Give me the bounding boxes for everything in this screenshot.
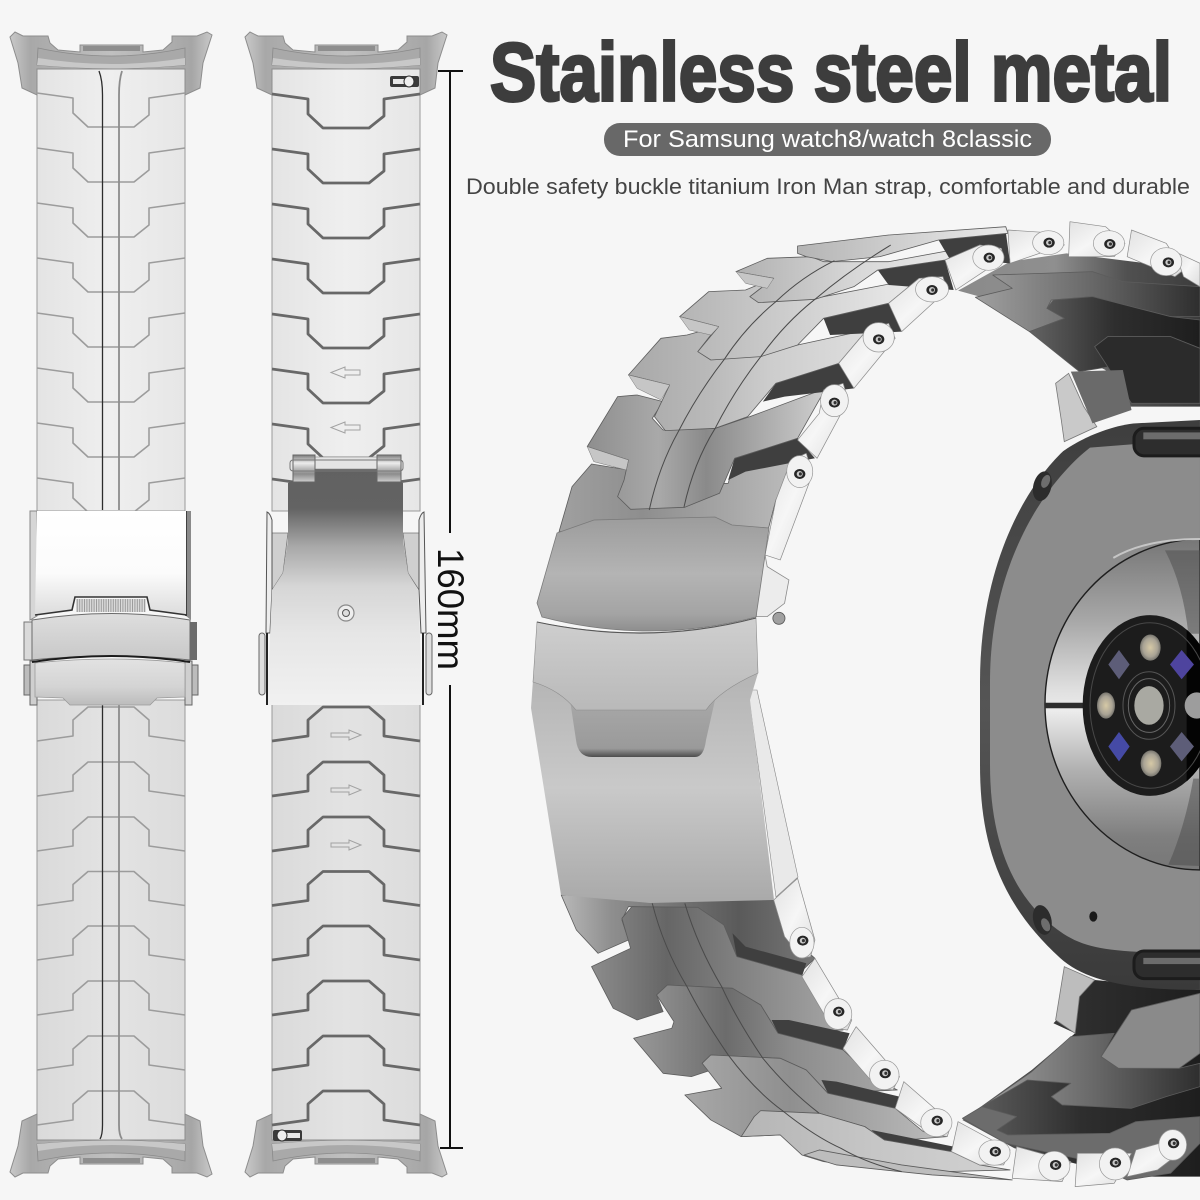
link B (587, 388, 826, 509)
center grooves (652, 903, 902, 1172)
buckle lower plate (531, 673, 774, 903)
top button (1134, 428, 1200, 456)
link L (804, 1150, 1012, 1180)
gap (733, 933, 806, 977)
center grooves (649, 245, 891, 510)
dimension: 160mm (430, 71, 471, 1148)
gap (821, 1080, 899, 1110)
icon: micro-adjust pin top (390, 76, 419, 87)
strap links and end caps (10, 32, 212, 1177)
link I (634, 985, 897, 1093)
link D (680, 278, 919, 360)
icon: micro-adjust pin bottom (273, 1130, 302, 1141)
link seams lower (37, 707, 185, 1125)
link seams upper (37, 93, 185, 512)
gap (772, 1020, 850, 1050)
front view strap (10, 32, 212, 1177)
clasp hinge (756, 553, 789, 624)
watch body back (980, 420, 1200, 990)
gap (728, 438, 815, 480)
link H (592, 907, 843, 1033)
far side band bottom (962, 967, 1200, 1180)
main band lower half (561, 878, 1187, 1187)
buckle upper plate (537, 517, 769, 631)
link seams lower (272, 707, 420, 1125)
gap (939, 232, 1010, 263)
center groove lines (99, 71, 122, 1139)
compatibility pill: For Samsung watch8/watch 8classic (623, 126, 1032, 153)
bottom button (1134, 951, 1200, 979)
sensor window (1083, 615, 1200, 796)
back view strap (245, 32, 447, 1177)
link E (736, 245, 980, 303)
link K (741, 1111, 1010, 1172)
gap (824, 303, 902, 335)
gap (763, 363, 854, 402)
side plates with pins (774, 878, 1187, 1187)
far side lug top (1056, 370, 1132, 442)
subtitle: Double safety buckle titanium Iron Man strap, comfortable and durable (466, 174, 1190, 199)
main buckle (531, 517, 798, 903)
side plates with pins (765, 222, 1200, 560)
arrows pointing right (331, 730, 361, 850)
knurled slot (570, 700, 715, 757)
link J (685, 1055, 947, 1142)
strap links and end caps (245, 32, 447, 1177)
main band upper half (559, 222, 1200, 624)
front clasp (24, 511, 198, 705)
vent hole (1089, 911, 1097, 922)
buckle right side strip (748, 690, 798, 897)
far side band top (958, 253, 1200, 407)
buckle middle plate (533, 618, 758, 710)
gap (871, 1130, 954, 1153)
back clasp (259, 455, 432, 705)
gap (878, 260, 954, 290)
screw bottom (1030, 903, 1055, 937)
arrows pointing left (331, 367, 360, 433)
link A (559, 453, 798, 532)
link F (798, 227, 1008, 262)
silver sensor ring (1045, 539, 1200, 870)
link C (628, 327, 867, 431)
link G (561, 895, 815, 975)
dimension: 160mm: 160mm (430, 548, 471, 670)
link seams upper (272, 94, 420, 513)
case outer (980, 420, 1200, 990)
case back plate (990, 439, 1200, 953)
screw top (1030, 469, 1055, 503)
